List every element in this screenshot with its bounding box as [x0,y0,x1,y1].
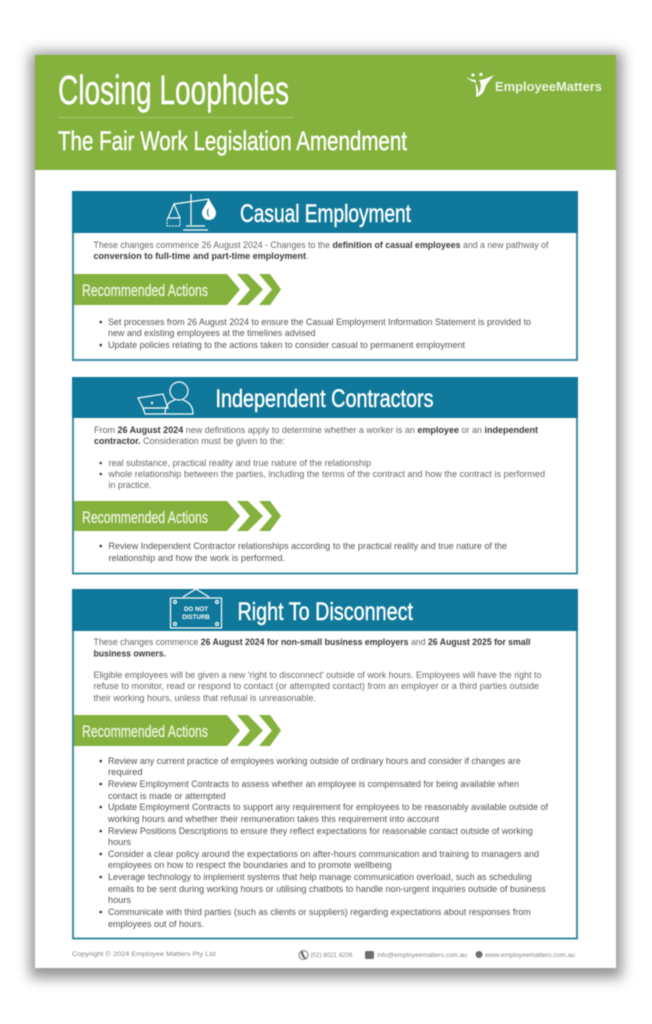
footer [72,950,575,960]
action list: employees on how to respect the boundaries and to promote wellbeing [108,860,392,870]
intro text: refuse to monitor, read or respond to contact (or attempted contact) from an employer or a third parties outside [94,681,539,691]
icon: do not disturb sign: DISTURB [182,614,210,621]
action list: Review Employment Contracts to assess whether an employee is compensated for being available when [108,779,519,789]
icon: do not disturb sign: DO NOT [184,606,208,613]
recommended actions banner [74,715,281,746]
header banner [35,55,616,170]
intro text: business owners. [94,648,166,658]
recommended actions banner: Recommended Actions [82,508,208,527]
intro text: From 26 August 2024 new definitions apply to determine whether a worker is an employee or an independent [94,425,538,435]
intro text [94,425,538,446]
intro text [94,637,542,703]
heading: Right To Disconnect [238,598,413,626]
panel: right to disconnect [72,589,578,938]
action list: relationship and how the work is performed. [108,553,285,563]
action list: Consider a clear policy around the expectations on after-hours communication and training to managers and [108,849,539,859]
website: www.employeematters.com.au [484,952,575,959]
considerations list: real substance, practical reality and true nature of the relationship [108,458,371,468]
action list: emails to be sent during working hours or utilising chatbots to handle non-urgent inquiries outside of business [108,884,546,894]
email address: info@employeematters.com.au [377,952,467,959]
action list: working hours and whether their remuneration takes this requirement into account [107,814,439,824]
icon: scales [167,194,216,230]
action list: Communicate with third parties (such as clients or suppliers) regarding expectations about responses from [108,907,531,917]
action list [99,541,507,563]
action list: new and existing employees at the timelines advised [108,328,316,338]
considerations list: in practice. [108,480,152,490]
recommended actions banner: Recommended Actions [82,281,208,300]
logo wordmark: EmployeeMatters [495,79,602,94]
icon: logo figure [466,73,494,97]
icon: globe [476,951,482,958]
intro text: conversion to full-time and part-time employment. [94,251,308,261]
title: Closing Loopholes [58,67,289,113]
panel: independent contractors [72,377,578,574]
heading: Independent Contractors [216,385,434,413]
action list: Review Independent Contractor relationships according to the practical reality and true nature of the [108,541,507,551]
recommended actions banner [74,501,281,531]
action list: Update Employment Contracts to support any requirement for employees to be reasonably available outside of [108,802,548,812]
action list: Set processes from 26 August 2024 to ensure the Casual Employment Information Statement is provided to [108,317,531,327]
action list: Review Positions Descriptions to ensure they reflect expectations for reasonable contact outside of working [108,826,533,836]
action list: Update policies relating to the actions taken to consider casual to permanent employment [108,340,465,350]
icon: person with laptop [138,382,193,414]
action list: contact is made or attempted [108,791,226,801]
heading: Casual Employment [240,200,411,228]
icon: phone [299,950,308,960]
intro text: contractor. Consideration must be given to the: [94,436,285,446]
intro text: These changes commence 26 August 2024 - Changes to the definition of casual employees and a new pathway of [94,240,549,250]
panel: casual employment [72,191,578,360]
recommended actions banner: Recommended Actions [82,722,208,741]
action list [99,317,531,350]
considerations list: whole relationship between the parties, including the terms of the contract and how the contract is performed [108,469,545,479]
action list: hours [108,895,131,905]
logo [466,73,602,97]
intro text: Eligible employees will be given a new 'right to disconnect' outside of work hours. Employees will have the right to [94,670,542,680]
phone number: (02) 8021 4206 [310,952,353,959]
icon: do not disturb sign [170,589,222,628]
subtitle: The Fair Work Legislation Amendment [58,126,407,156]
action list: required [108,767,143,777]
action list [99,756,548,929]
icon: email [365,951,374,959]
intro text [94,240,549,261]
action list: Review any current practice of employees working outside of ordinary hours and consider if changes are [108,756,521,766]
action list: hours [108,837,131,847]
action list: Leverage technology to implement systems that help manage communication overload, such as scheduling [108,872,532,882]
recommended actions banner [74,274,281,305]
copyright: Copyright © 2024 Employee Matters Pty Ltd [72,950,216,958]
intro text: These changes commence 26 August 2024 for non-small business employers and 26 August 2025 for small [94,637,530,647]
intro text: their working hours, unless that refusal is unreasonable. [94,693,316,703]
considerations list [99,458,545,490]
action list: employees out of hours. [108,919,204,929]
